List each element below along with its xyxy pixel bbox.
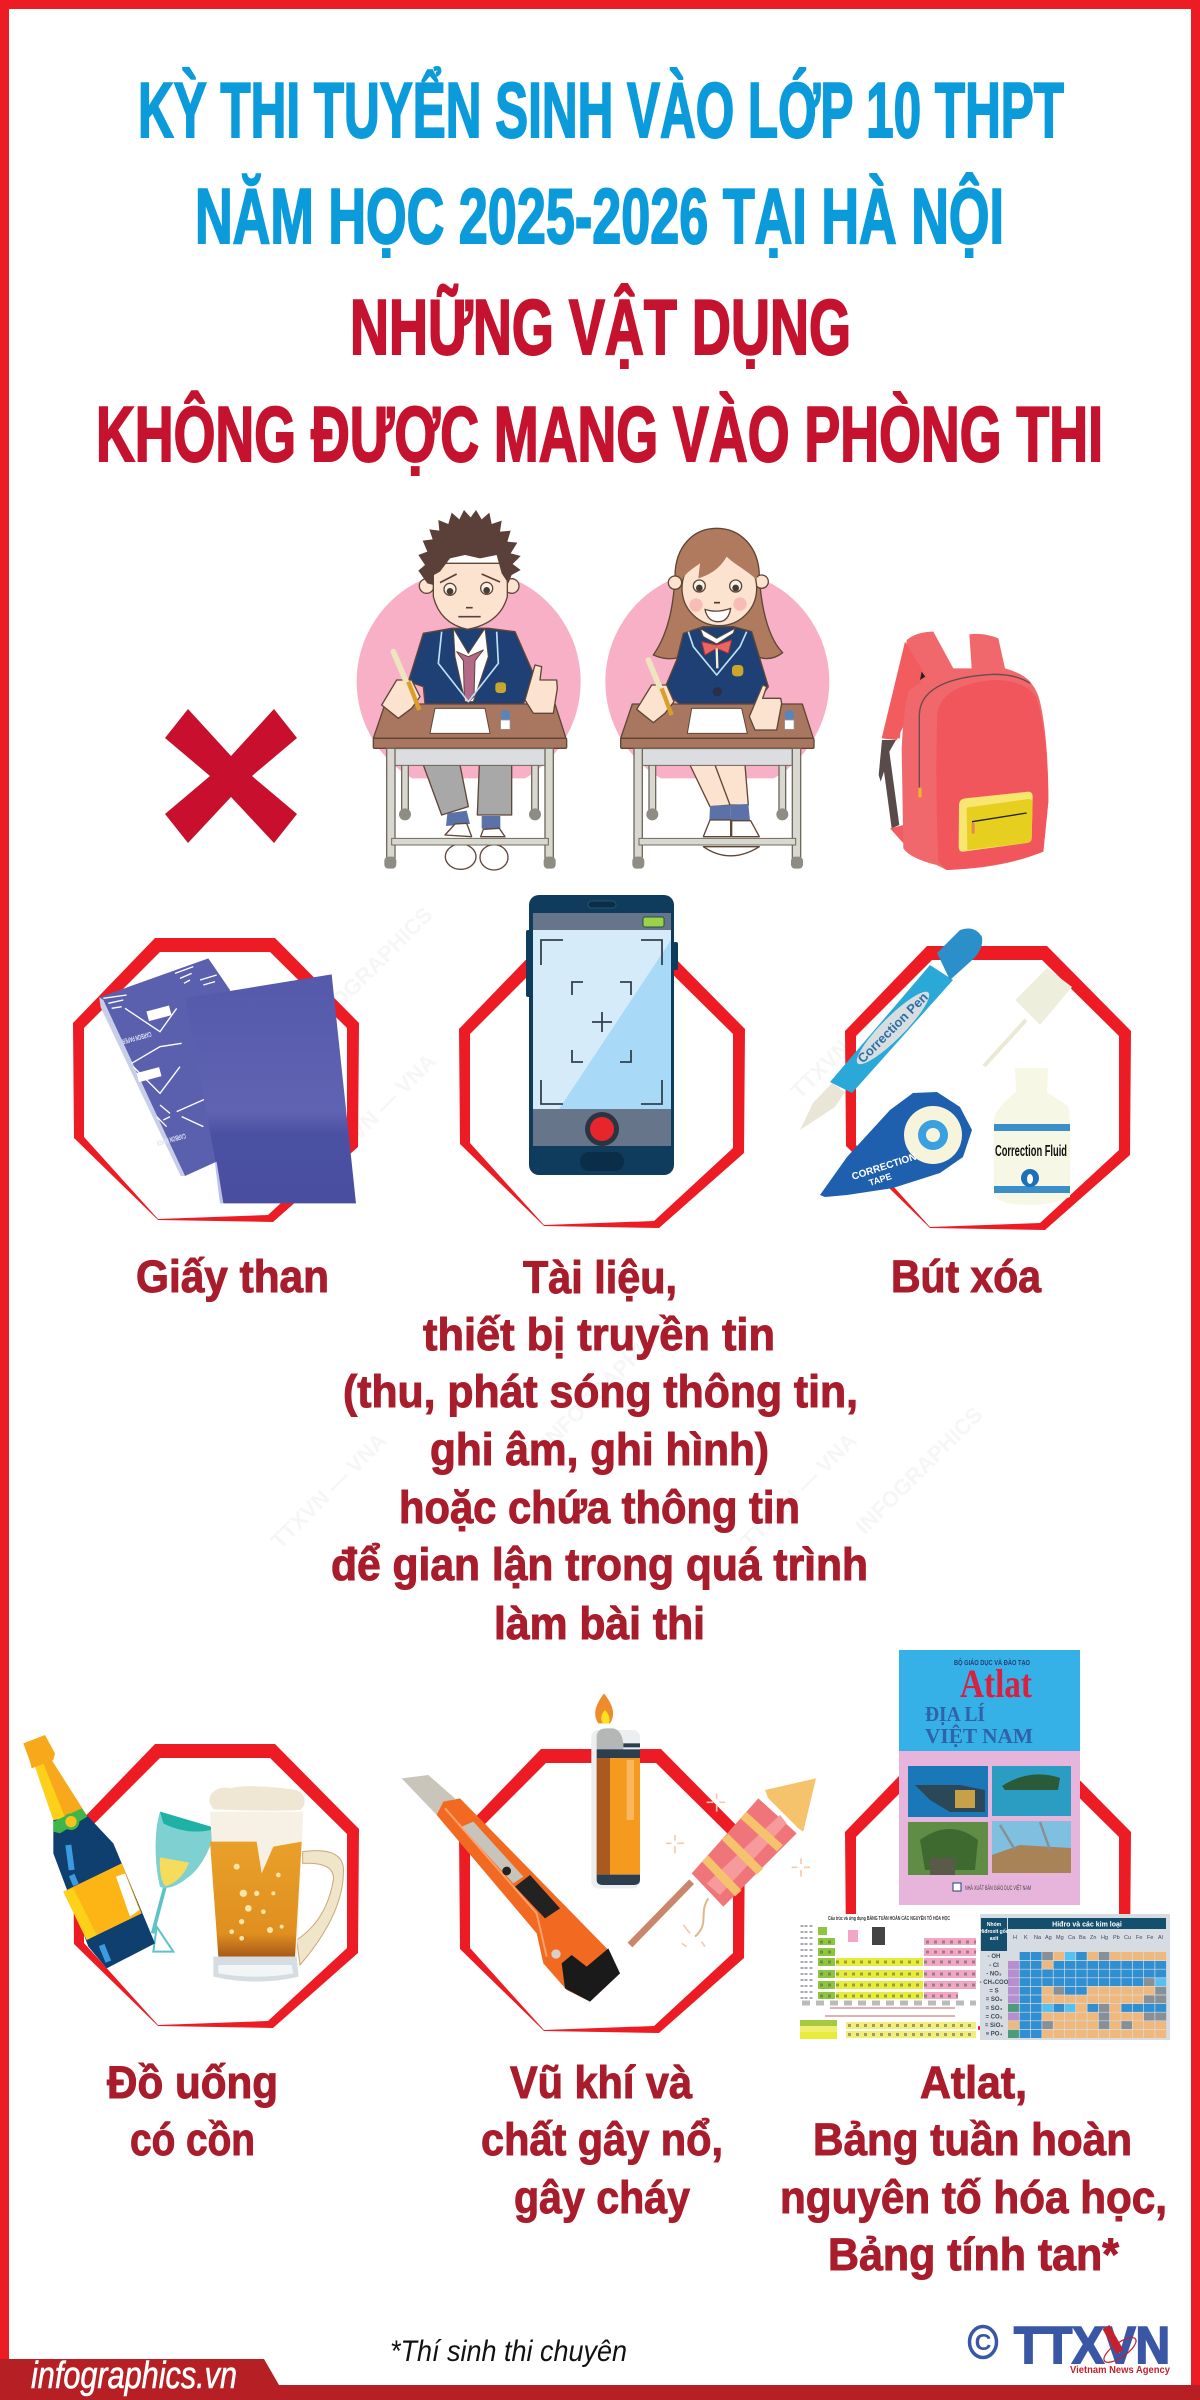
illustration: boy at desk: [357, 510, 581, 870]
logo: TTXVN: C: [975, 2329, 991, 2355]
footnote: *Thí sinh thi chuyên: [390, 2335, 627, 2368]
chart: solubility table: Fe: [1136, 1935, 1142, 1941]
chart: solubility table: = SO₄: [986, 2006, 1002, 2012]
label: documents and devices: thiết bị truyền tin: [423, 1309, 775, 1360]
illustration: girl at desk: [605, 528, 829, 869]
icon: correction pen, tape and fluid: TAPE: [868, 1171, 893, 1188]
label: Atlat, Bảng tuần hoàn, Bảng tính tan: [780, 2057, 1167, 2280]
chart: solubility table: = CO₃: [986, 2014, 1003, 2020]
icon: carbon paper sheets: CARBON PAPER: [121, 1030, 152, 1046]
chart: solubility table: - CH₃COO: [980, 1980, 1009, 1986]
icon: champagne, glass and beer mug: [23, 1735, 343, 1982]
logo: TTXVN: TTXVN: [1014, 2317, 1170, 2375]
chart: solubility table: Al: [1158, 1935, 1163, 1941]
label: Bút xóa: Bút xóa: [891, 1251, 1042, 1302]
octagon frame: [459, 944, 745, 1228]
label: documents and devices: (thu, phát sóng thông tin,: [343, 1366, 858, 1417]
label: Vũ khí và chất gây nổ, gây cháy: Vũ khí và: [510, 2057, 693, 2108]
label: Vũ khí và chất gây nổ, gây cháy: chất gây nổ,: [481, 2114, 723, 2165]
chart: solubility table: Mg: [1056, 1935, 1064, 1941]
icon: correction pen, tape and fluid: CORRECTION: [851, 1152, 918, 1183]
label: Atlat, Bảng tuần hoàn, Bảng tính tan: Bảng tuần hoàn: [813, 2114, 1132, 2165]
chart: solubility table: Pb: [1113, 1935, 1120, 1941]
icon: Atlat book cover: NHÀ XUẤT BẢN GIÁO DỤC VIỆT NAM: [965, 1884, 1031, 1892]
label: Atlat, Bảng tuần hoàn, Bảng tính tan: Bảng tính tan*: [828, 2229, 1119, 2280]
octagon frame: [459, 1749, 745, 2033]
chart: solubility table: H: [1013, 1935, 1017, 1941]
chart: periodic table: [800, 1914, 978, 2040]
label: documents and devices: Tài liệu,: [523, 1252, 677, 1303]
label: Atlat, Bảng tuần hoàn, Bảng tính tan: nguyên tố hóa học,: [780, 2172, 1167, 2223]
text: INFOGRAPHICS: [301, 902, 437, 1039]
label: Giấy than: Giấy than: [136, 1251, 329, 1302]
panel: carbon paper: [73, 938, 359, 1302]
chart: solubility table: = S: [989, 1988, 999, 1994]
label: Đồ uống có cồn: có cồn: [130, 2114, 255, 2165]
label: Đồ uống có cồn: [107, 2057, 278, 2165]
text: TTXVN — VNA: [315, 1048, 441, 1174]
chart: solubility table: K: [1024, 1935, 1028, 1941]
panel: correction pens: [800, 929, 1131, 1302]
icon: Atlat book cover: VIỆT NAM: [925, 1724, 1033, 1748]
icon: Atlat book cover: Atlat: [960, 1661, 1033, 1706]
label: documents and devices: để gian lận trong quá trình: [331, 1539, 868, 1590]
chart: solubility table: Cu: [1124, 1935, 1131, 1941]
icon: correction pen, tape and fluid: Correction Fluid: [995, 1143, 1067, 1160]
panel: documents and transmitting devices: [331, 895, 868, 1649]
text: TTXVN — VNA: [786, 978, 912, 1104]
label: Vũ khí và chất gây nổ, gây cháy: gây cháy: [514, 2172, 690, 2223]
icon: backpack: [879, 632, 1048, 870]
octagon frame: [73, 938, 359, 1222]
icon: correction pen, tape and fluid: Correction Pen: [854, 989, 931, 1066]
text: INFOGRAPHICS: [536, 1317, 673, 1454]
icon: Atlat book cover: BỘ GIÁO DỤC VÀ ĐÀO TẠO: [954, 1658, 1030, 1667]
chart: solubility table: Nhóm: [987, 1922, 1002, 1928]
text: TTXVN — VNA: [736, 1428, 862, 1554]
panel: atlas and periodic table: [780, 1650, 1170, 2280]
chart: solubility table: = SiO₃: [985, 2023, 1003, 2029]
chart: solubility table: - Cl: [989, 1963, 999, 1969]
logo: TTXVN: Vietnam News Agency: [1070, 2365, 1170, 2376]
chart: solubility table: - NO₃: [986, 1972, 1002, 1978]
icon: correction pen, tape and fluid: [800, 929, 1072, 1205]
panel: weapons and explosives: [402, 1693, 816, 2223]
footer bar: [0, 2355, 1200, 2400]
label: documents and devices: ghi âm, ghi hình): [430, 1424, 769, 1475]
label: Đồ uống có cồn: Đồ uống: [107, 2057, 278, 2108]
icon: Atlat book cover: ĐỊA LÍ: [925, 1702, 985, 1726]
chart: solubility table: = SO₃: [986, 1997, 1003, 2003]
chart: solubility table: Hiđroxit gốc: [979, 1928, 1009, 1935]
panel: alcoholic drinks: [23, 1735, 359, 2165]
chart: solubility table: axit: [990, 1936, 999, 1942]
label: documents and devices: hoặc chứa thông tin: [399, 1482, 800, 1533]
label: documents and devices: [331, 1252, 868, 1649]
chart: periodic table: Cấu trúc và ứng dụng BẢNG TUẦN HOÀN CÁC NGUYÊN TỐ HÓA HỌC: [828, 1914, 950, 1922]
chart: solubility table: Fe: [1147, 1935, 1153, 1941]
label: Vũ khí và chất gây nổ, gây cháy: [481, 2057, 723, 2223]
chart: solubility table: - OH: [988, 1954, 1000, 1960]
octagon frame: [73, 1744, 359, 2028]
chart: solubility table: Hg: [1101, 1935, 1108, 1941]
text: INFOGRAPHICS: [851, 1402, 987, 1539]
icon: Atlat book cover: [899, 1650, 1080, 1905]
chart: solubility table: [979, 1914, 1170, 2040]
title: [96, 66, 1103, 478]
heading line 3: NHỮNG VẬT DỤNG: [350, 283, 851, 371]
text: TTXVN — VNA: [266, 1428, 392, 1554]
chart: solubility table: Ba: [1079, 1935, 1087, 1941]
chart: solubility table: Zn: [1090, 1935, 1096, 1941]
icon: carbon paper sheets: [99, 958, 356, 1203]
label: Atlat, Bảng tuần hoàn, Bảng tính tan: Atlat,: [920, 2057, 1027, 2108]
chart: solubility table: ≡ PO₄: [986, 2032, 1002, 2038]
footer site name: infographics.vn: [31, 2355, 237, 2397]
label: documents and devices: làm bài thi: [494, 1598, 705, 1649]
icon: knife, lighter and firework: [402, 1693, 816, 2002]
octagon frame: [845, 1747, 1131, 2031]
icon: red cross: [165, 709, 297, 843]
icon: carbon paper sheets: CARBON PAPER: [155, 1131, 187, 1148]
octagon frame: [845, 946, 1131, 1230]
chart: solubility table: Na: [1034, 1935, 1042, 1941]
chart: solubility table: Ag: [1045, 1935, 1052, 1941]
chart: solubility table: Hiđro và các kim loại: [1052, 1922, 1122, 1928]
icon: smartphone: [526, 895, 678, 1175]
chart: solubility table: Ca: [1068, 1935, 1076, 1941]
